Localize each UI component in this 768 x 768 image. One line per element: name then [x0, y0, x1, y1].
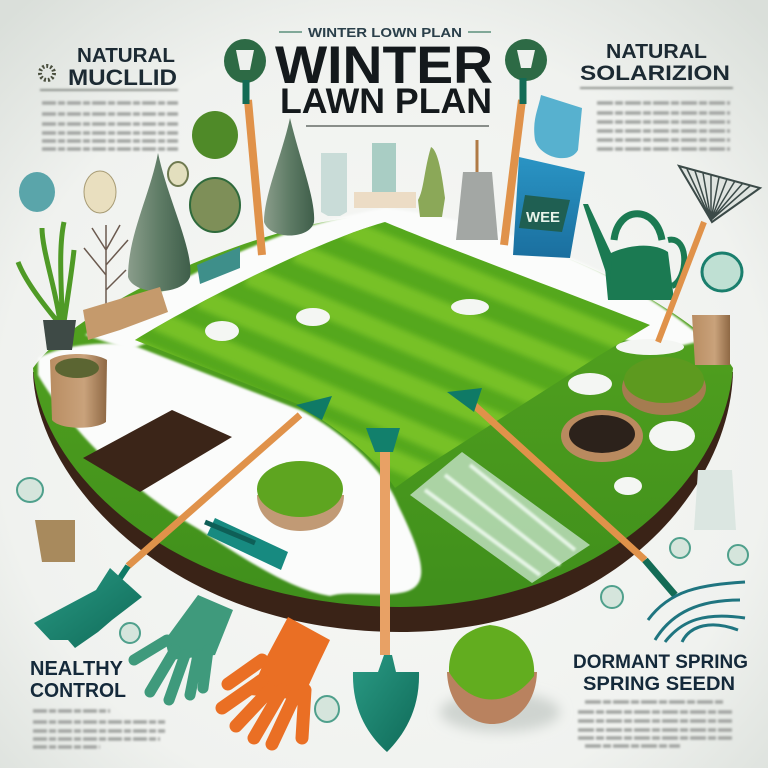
bottle: center [372, 143, 396, 193]
glove: orange [222, 617, 330, 744]
eyebrow: WINTER LOWN PLAN [308, 25, 462, 40]
shovel: top right [504, 39, 547, 245]
watering can [583, 204, 684, 300]
heading: healthy control: CONTROL [30, 680, 126, 702]
bowl of grass [440, 625, 560, 732]
heading: dormant spring: DORMANT SPRING [573, 652, 748, 673]
icon: push brush [205, 518, 288, 570]
bag: seed: WEE [526, 209, 560, 226]
bag: top blue [534, 95, 582, 158]
heading: healthy control [30, 658, 126, 702]
panel: healthy control (bottom left) [30, 658, 165, 747]
title [275, 36, 493, 121]
text block: control description [33, 711, 165, 747]
spade: center [353, 428, 419, 752]
shovel: top left [224, 39, 266, 255]
plant: tall grass pot [18, 222, 76, 350]
icon: small olive circle [168, 162, 188, 186]
bottle: left [321, 153, 347, 216]
icon: small green box [197, 247, 240, 284]
heading: natural mulch: NATURAL [77, 45, 175, 67]
text block: solarization description [580, 88, 733, 149]
title: LAWN PLAN [280, 82, 492, 121]
text block: seeding description [578, 702, 732, 746]
snow: back rim [85, 208, 705, 352]
lawn disc soil [33, 372, 733, 632]
panel: natural mulch (top left) [40, 45, 178, 149]
icon: soil dish [561, 410, 643, 462]
bottle: right [418, 147, 445, 217]
heading: natural solarization: SOLARIZION [580, 62, 730, 85]
lawn disc grass [33, 215, 733, 607]
heading: dormant spring [573, 652, 748, 695]
tree: left cone [128, 153, 190, 291]
heading: natural mulch: MUCLLID [68, 65, 177, 90]
title block [275, 25, 493, 136]
icon: beige circle [84, 171, 116, 213]
heading: healthy control: NEALTHY [30, 658, 124, 680]
soil patch [83, 410, 232, 492]
picket fence [354, 192, 416, 208]
main lawn [135, 222, 650, 488]
snow clumps on lawn [205, 299, 695, 495]
heading: natural solarization [580, 41, 730, 85]
plastic sheet [410, 452, 590, 583]
panel: dormant spring seeding (bottom right) [573, 652, 748, 746]
icon: circle badge right [702, 253, 742, 291]
pot left [50, 354, 107, 428]
panel: natural solarization (top right) [580, 41, 733, 149]
spade: left diagonal [34, 396, 332, 648]
heading: natural solarization: NATURAL [606, 41, 707, 63]
rake: top right [658, 166, 760, 342]
cup [692, 315, 730, 365]
icon: mesh circle [190, 178, 240, 232]
title: WINTER [275, 36, 493, 95]
tree: right cone [264, 118, 314, 236]
heading: dormant spring: SPRING SEEDN [583, 674, 735, 695]
small plant box left [35, 520, 75, 562]
hand rake small [456, 140, 498, 240]
icon: small badge [40, 66, 54, 80]
bag: seed [513, 157, 585, 258]
subtitle [306, 126, 489, 136]
icon: grass bowl on lawn right [622, 357, 706, 415]
tree: bare sapling [84, 225, 128, 310]
glove: green [134, 595, 233, 700]
products [321, 143, 445, 217]
icon: leaf circle [192, 111, 238, 159]
heading: natural mulch [68, 45, 177, 90]
snow: left side patch [38, 343, 421, 596]
lawn mowing stripes [135, 226, 636, 479]
text block: mulch description [40, 90, 178, 149]
bottle bottom right [694, 470, 736, 530]
icon: small circle badges [17, 478, 748, 722]
rake: right diagonal [447, 388, 745, 642]
icon: grass bowl on snow [257, 461, 344, 531]
circle icons [19, 111, 240, 232]
icon: teal circle [19, 172, 55, 212]
planter boxes [83, 287, 168, 340]
